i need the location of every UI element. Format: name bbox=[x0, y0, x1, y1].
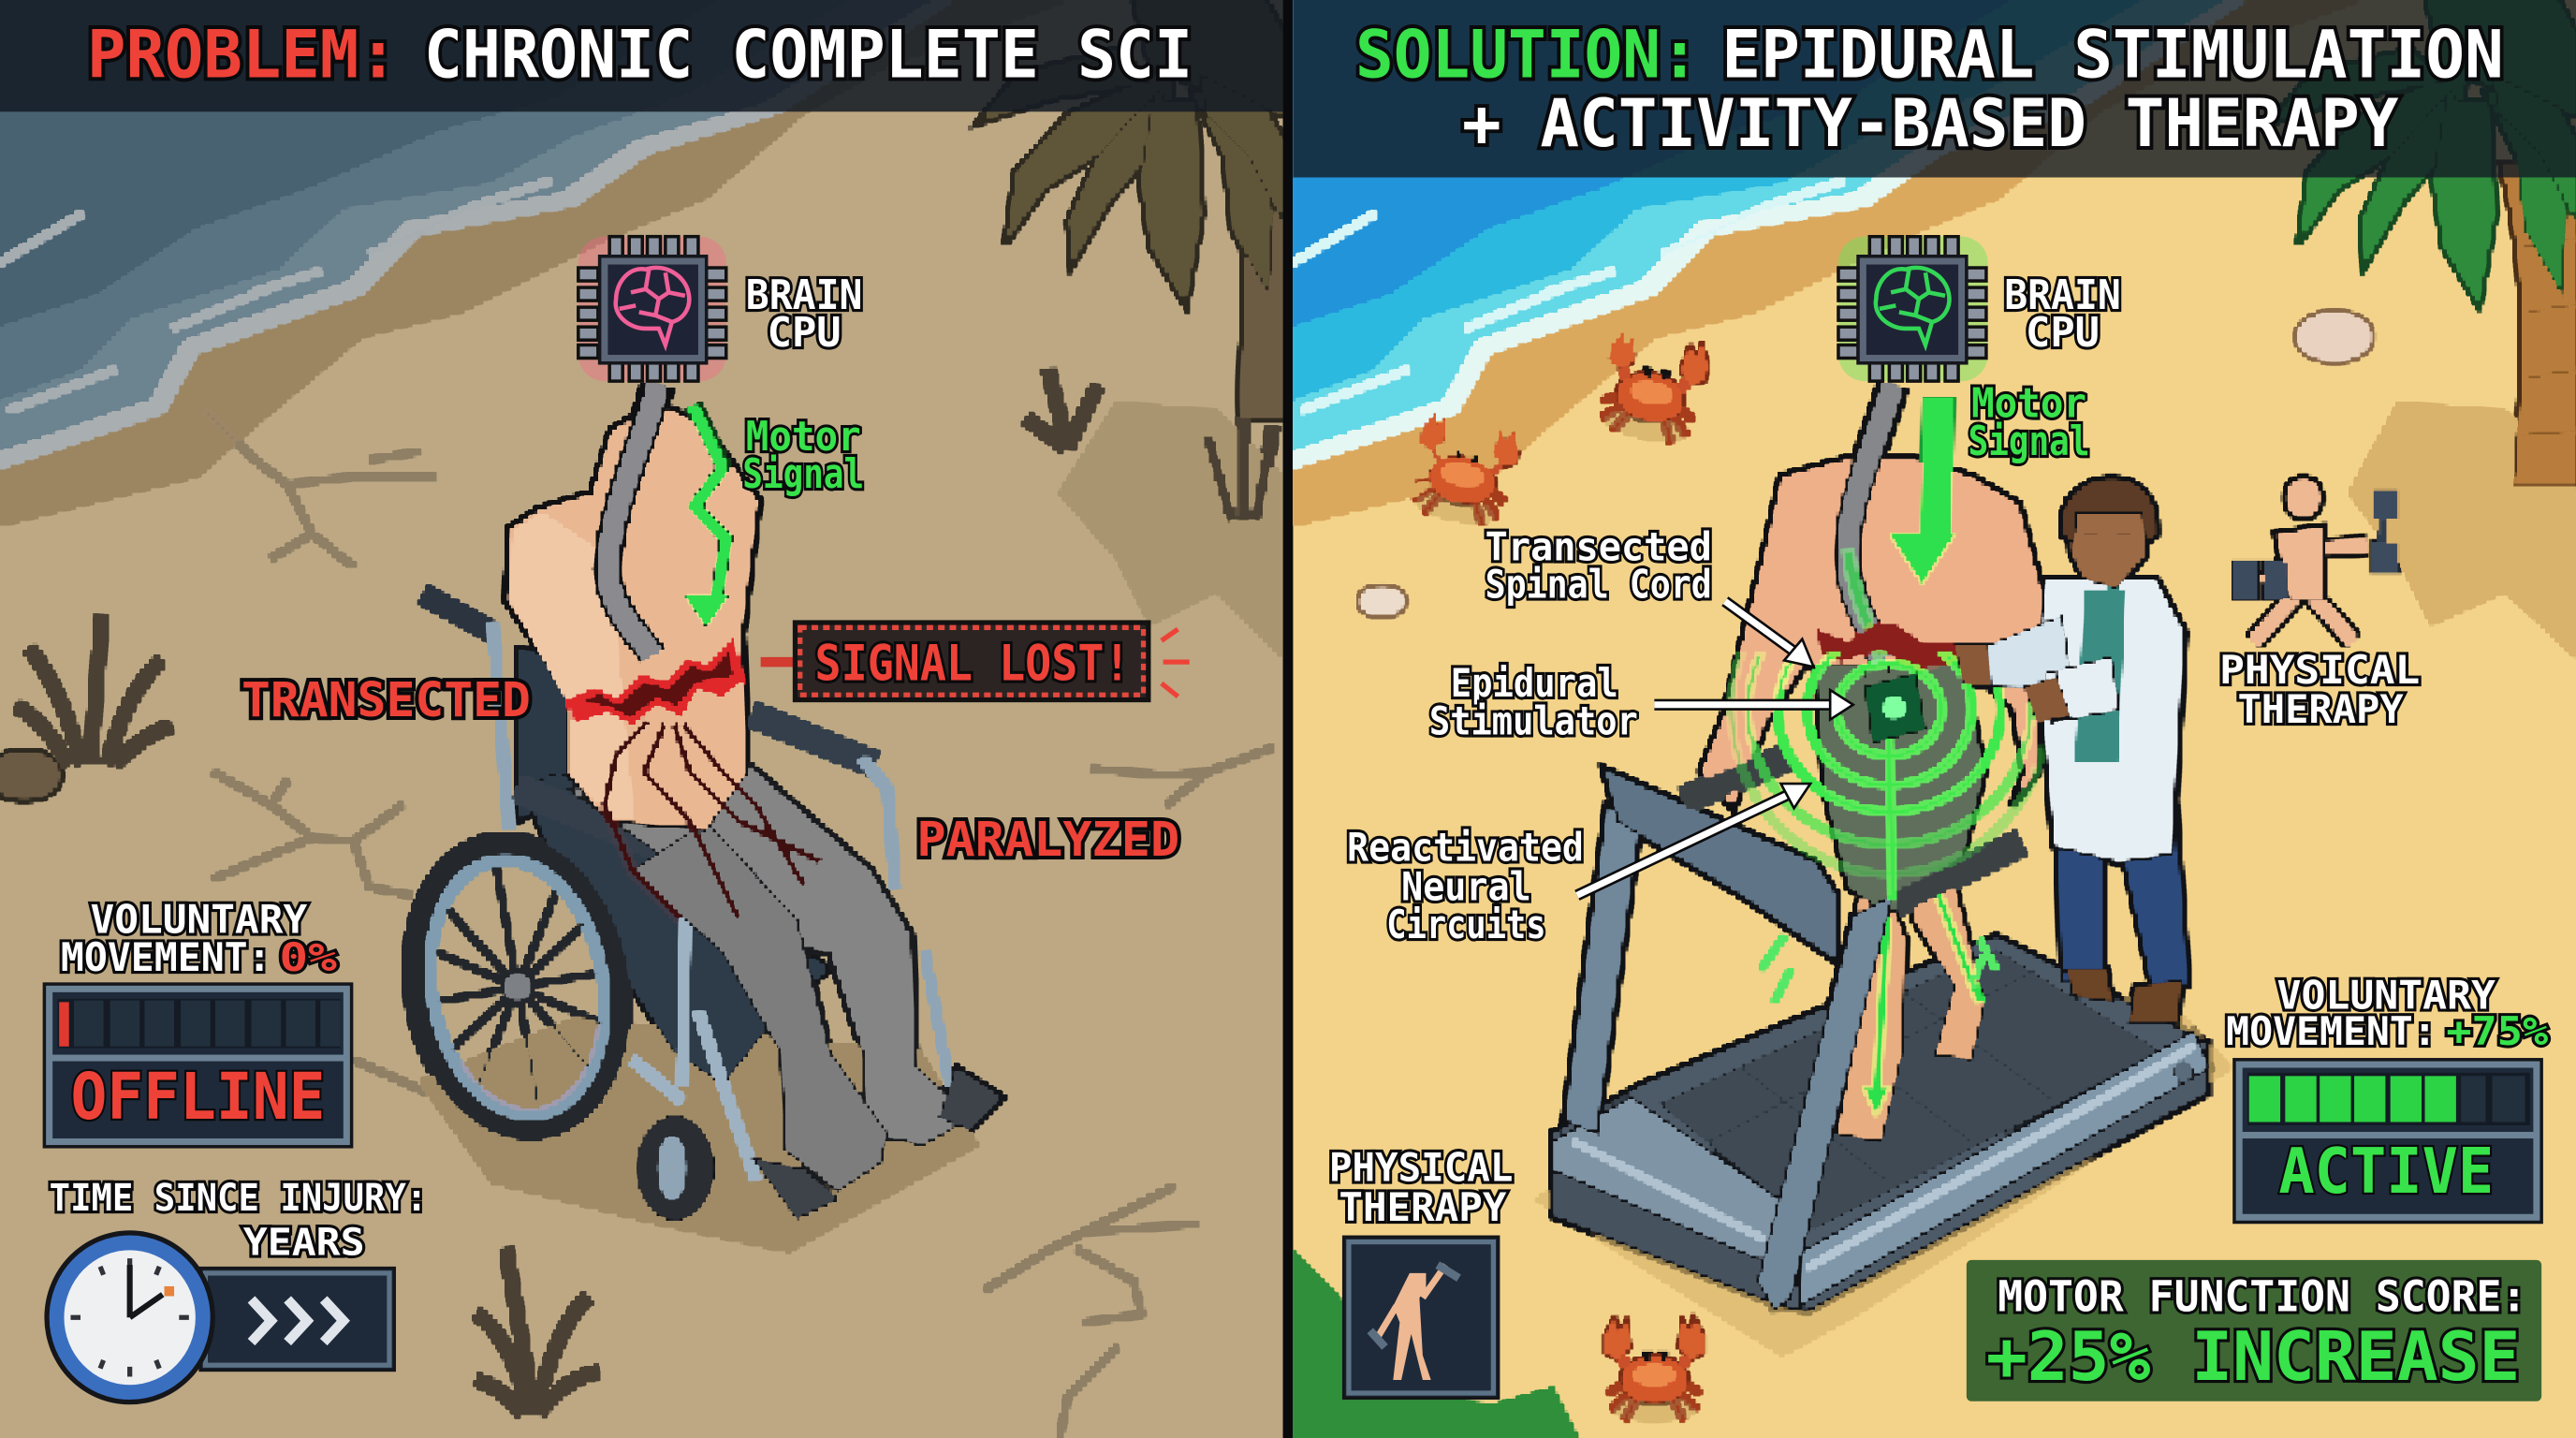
callout: reactivated neural circuits bbox=[1347, 784, 1810, 947]
palm tree bbox=[2271, 0, 2576, 657]
callout: signal lost: SIGNAL LOST! bbox=[815, 635, 1131, 692]
torso bbox=[506, 403, 759, 829]
wound bbox=[567, 636, 742, 726]
label: brain cpu: BRAIN bbox=[2004, 271, 2121, 319]
chip: brain cpu green bbox=[1838, 237, 1988, 381]
label: voluntary movement 0%: MOVEMENT: bbox=[61, 934, 271, 980]
callout: transected spinal cord bbox=[1486, 523, 1814, 667]
header bar: problem: PROBLEM: bbox=[87, 16, 398, 93]
icon: shell large bbox=[2297, 312, 2372, 361]
status panel: OFFLINE bbox=[70, 1060, 326, 1135]
handles bbox=[1684, 756, 2021, 1310]
figure: physical therapy lunge bbox=[2234, 478, 2398, 640]
label: brain cpu bbox=[746, 271, 862, 357]
label: physical therapy upper: THERAPY bbox=[2237, 686, 2404, 732]
label: physical therapy upper: PHYSICAL bbox=[2219, 647, 2420, 693]
callout: transected spinal cord: Spinal Cord bbox=[1486, 562, 1712, 608]
panel: problem scene bbox=[0, 0, 1283, 1438]
stimulator chip bbox=[1865, 660, 1925, 742]
status panel: ACTIVE bbox=[2278, 1135, 2494, 1208]
callout: epidural stimulator bbox=[1429, 660, 1853, 743]
label: motor signal: Signal bbox=[742, 450, 864, 498]
icon: clock bbox=[44, 1230, 215, 1404]
header bar: solution: EPIDURAL STIMULATION bbox=[1721, 16, 2504, 93]
icon card: physical therapy bbox=[1344, 1237, 1499, 1398]
paralyzed legs bbox=[567, 764, 1003, 1219]
label: motor signal bbox=[1969, 380, 2089, 465]
motor function score panel: +25% INCREASE bbox=[1986, 1317, 2520, 1396]
arrow bbox=[1577, 784, 1810, 895]
green motor signal arrow bbox=[1888, 399, 1956, 585]
label: physical therapy upper bbox=[2219, 647, 2420, 732]
label: brain cpu: CPU bbox=[768, 309, 842, 357]
callout: epidural stimulator: Stimulator bbox=[1429, 697, 1638, 743]
bush bottom left bbox=[1293, 1252, 1577, 1437]
icon: crab bottom bbox=[1605, 1317, 1704, 1421]
dry plants bbox=[0, 370, 1273, 1413]
icon: crab left bbox=[1405, 408, 1523, 530]
label: physical therapy lower: THERAPY bbox=[1339, 1184, 1507, 1230]
doctor bbox=[1955, 478, 2188, 1021]
header bar: solution bbox=[1293, 0, 2576, 178]
status panel bbox=[2234, 1060, 2541, 1223]
shorts with reactivation bbox=[1815, 666, 1984, 915]
lightning motor signal arrow bbox=[683, 407, 729, 627]
big wheel bbox=[402, 832, 633, 1141]
status panel bbox=[44, 984, 352, 1147]
label: voluntary movement 0%: VOLUNTARY bbox=[91, 897, 308, 943]
icon: crab upper bbox=[1594, 326, 1712, 448]
callout: reactivated neural circuits: Neural bbox=[1401, 864, 1531, 910]
arrow bbox=[1654, 690, 1853, 720]
callout: transected spinal cord: Transected bbox=[1486, 523, 1712, 569]
label: motor signal: Signal bbox=[1969, 418, 2089, 465]
chip: brain cpu red bbox=[578, 237, 726, 381]
label: paralyzed: PARALYZED bbox=[916, 813, 1179, 868]
voluntary movement readout: offline bbox=[44, 897, 352, 1147]
palm tree bbox=[977, 0, 1283, 657]
treadmill console bbox=[1603, 769, 1837, 961]
arrow bbox=[1725, 601, 1814, 667]
treadmill uprights bbox=[1564, 805, 1640, 1134]
pixel illustration: desolate beach and wheelchair patient bbox=[0, 0, 1283, 1437]
label: voluntary movement +75%: MOVEMENT: bbox=[2226, 1008, 2437, 1054]
label: motor signal: Motor bbox=[1971, 380, 2086, 428]
callout: reactivated neural circuits: Reactivated bbox=[1347, 824, 1584, 870]
motor function score panel bbox=[1967, 1260, 2541, 1401]
callout: signal lost bbox=[761, 623, 1190, 700]
pixel illustration: sunny beach, patient on treadmill with therapist bbox=[1293, 0, 2576, 1437]
label: physical therapy lower: PHYSICAL bbox=[1329, 1145, 1513, 1191]
label: brain cpu: CPU bbox=[2026, 309, 2100, 357]
panel divider bbox=[1283, 0, 1293, 1438]
label: time since injury years: YEARS bbox=[243, 1221, 365, 1265]
callout: epidural stimulator: Epidural bbox=[1451, 660, 1618, 706]
label: motor signal: Motor bbox=[746, 413, 861, 461]
label: voluntary movement 0% bbox=[61, 897, 338, 980]
icon: shell small bbox=[1358, 586, 1405, 616]
header bar: problem: CHRONIC COMPLETE SCI bbox=[424, 16, 1193, 93]
wheelchair bbox=[392, 594, 977, 1252]
label: motor signal bbox=[742, 413, 864, 498]
spinal cord bbox=[1848, 386, 1893, 660]
label: physical therapy lower bbox=[1329, 1145, 1513, 1230]
label: time since injury years bbox=[50, 1176, 427, 1265]
caster wheel bbox=[636, 1115, 714, 1221]
callout: reactivated neural circuits: Circuits bbox=[1386, 902, 1546, 947]
time since injury readout bbox=[44, 1176, 427, 1404]
severed spinal cord bbox=[607, 386, 657, 657]
ground cracks bbox=[205, 411, 1273, 1437]
panel: solution scene bbox=[1293, 0, 2576, 1438]
label: voluntary movement +75%: VOLUNTARY bbox=[2277, 972, 2496, 1018]
shoreline with bright water bbox=[1293, 0, 2361, 526]
voluntary movement readout: active bbox=[2226, 972, 2549, 1223]
label: brain cpu bbox=[2004, 271, 2121, 357]
reactivated neural rings bbox=[1732, 546, 2047, 903]
patient lower body bbox=[1837, 854, 1984, 1142]
label: time since injury years: TIME SINCE INJURY: bbox=[50, 1176, 427, 1220]
progress bar with chevrons bbox=[200, 1269, 394, 1370]
label: transected: TRANSECTED bbox=[242, 673, 531, 728]
label: voluntary movement +75% bbox=[2226, 972, 2549, 1054]
label: voluntary movement 0%: 0% bbox=[279, 934, 338, 980]
crabs and shells bbox=[1358, 312, 2372, 1421]
shoreline with grey water bbox=[0, 0, 930, 526]
label: voluntary movement +75%: +75% bbox=[2446, 1008, 2549, 1054]
severed nerves bbox=[605, 720, 822, 920]
header bar: solution: + ACTIVITY-BASED THERAPY bbox=[1462, 85, 2398, 162]
motion lines bbox=[1761, 936, 1996, 1002]
motor function score panel: MOTOR FUNCTION SCORE: bbox=[1998, 1271, 2526, 1321]
label: brain cpu: BRAIN bbox=[746, 271, 862, 319]
patient torso and arms bbox=[1701, 459, 2043, 808]
header bar: solution: SOLUTION: bbox=[1355, 16, 1699, 93]
header bar: problem bbox=[0, 0, 1283, 111]
deck bbox=[1553, 936, 2208, 1311]
treadmill bbox=[1536, 769, 2231, 1356]
wound healed bbox=[1815, 624, 1963, 670]
